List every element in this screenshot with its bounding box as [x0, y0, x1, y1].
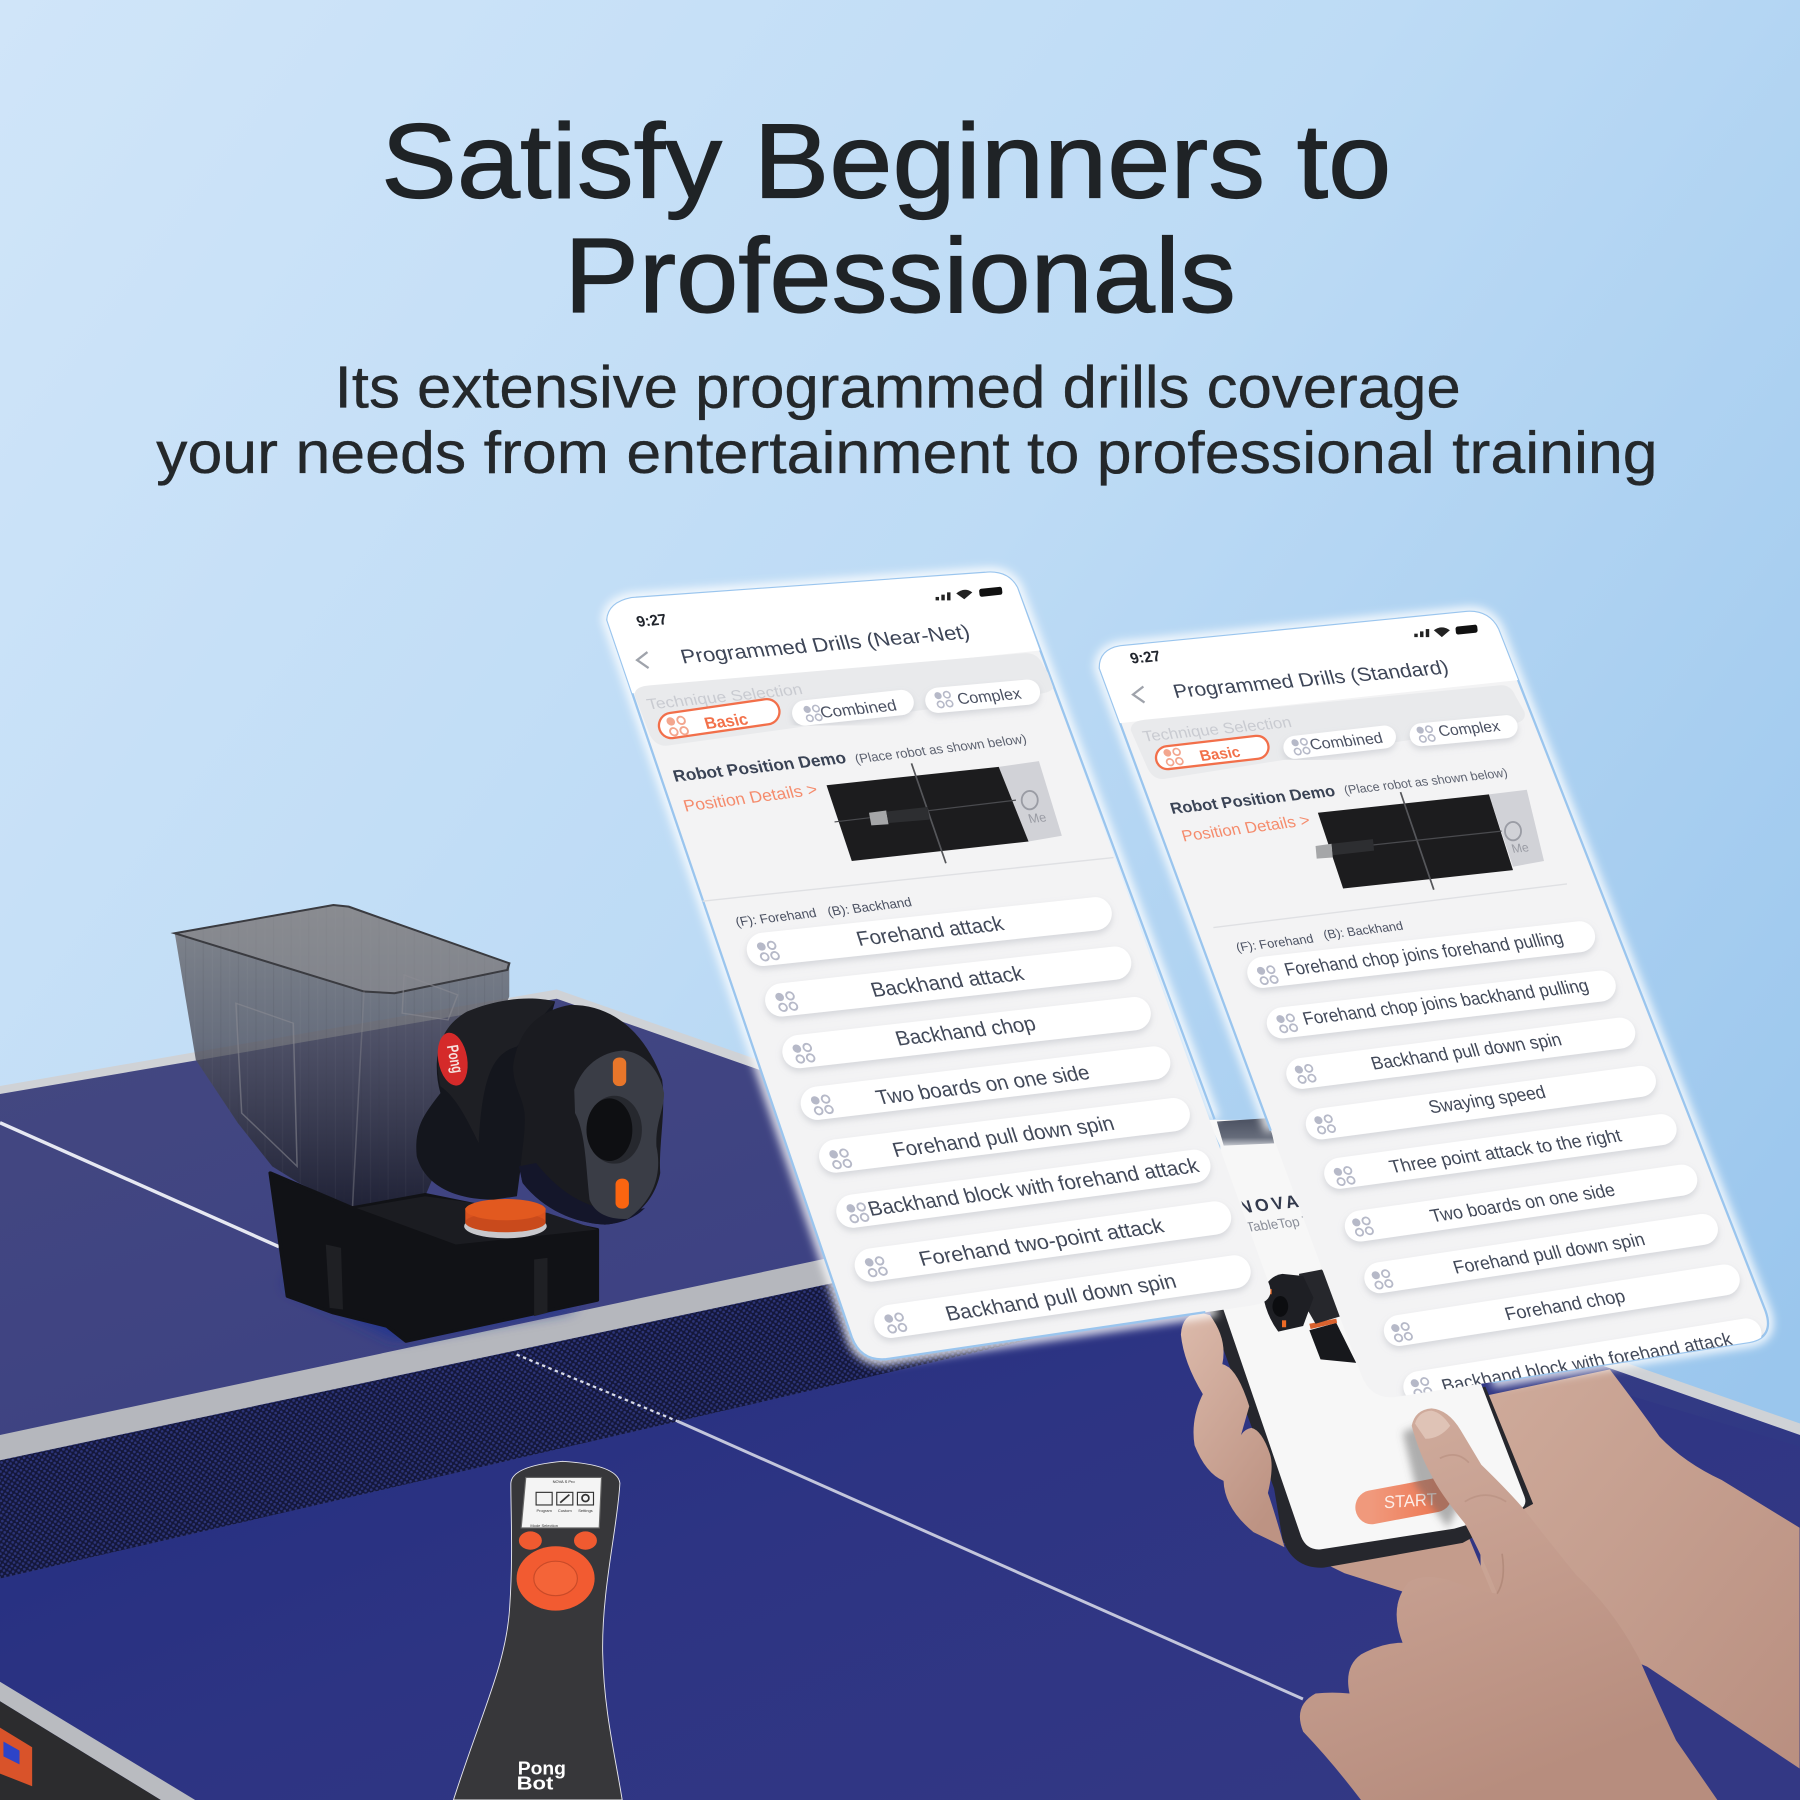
back chevron [637, 652, 649, 668]
drill list: Backhand pull down spin [942, 1270, 1179, 1326]
remote screen: Custom [558, 1508, 572, 1513]
remote screen: NOVA S Pro [553, 1479, 575, 1484]
near half surface [0, 1286, 1800, 1800]
lens [586, 1096, 642, 1164]
legend: (F): Forehand [1234, 932, 1315, 955]
head [513, 1005, 663, 1225]
subtitle: Its extensive programmed drills coverage [335, 354, 1461, 421]
phone top bar between panels [1217, 1118, 1274, 1146]
phone screen [1222, 1306, 1525, 1549]
drill list: Backhand block with forehand attack [865, 1154, 1202, 1221]
orange ring [464, 1199, 547, 1238]
subtitle: your needs from entertainment to professional training [156, 419, 1658, 486]
title: Professionals [564, 217, 1236, 335]
status bar [634, 587, 1003, 631]
phone frame [1208, 1306, 1533, 1568]
remote screen [521, 1477, 602, 1528]
legend [733, 894, 914, 929]
drill list: Forehand pull down spin [1450, 1228, 1647, 1278]
drill list: Backhand pull down spin [1368, 1028, 1564, 1073]
phone panel right: standard drills [1091, 603, 1768, 1397]
start button: START [1384, 1490, 1437, 1512]
drill list: Forehand two-point attack [916, 1214, 1167, 1271]
technique selection: Technique Selection [645, 681, 805, 713]
robot position demo: (Place robot as shown below) [853, 731, 1028, 766]
drill list: Forehand pull down spin [890, 1112, 1117, 1162]
drill list: Backhand chop [893, 1012, 1039, 1050]
back chevron [1133, 686, 1145, 703]
technique selection: Complex [1436, 718, 1502, 740]
legend: (B): Backhand [1322, 919, 1405, 942]
base [270, 1173, 597, 1341]
remote logo: Pong [518, 1758, 566, 1779]
net top band [0, 1165, 1263, 1460]
NOVA app text: NOVA [1236, 1191, 1304, 1217]
remote screen: Settings [578, 1508, 593, 1513]
robot position demo: (Place robot as shown below) [1342, 766, 1509, 797]
technique selection: Basic [1198, 744, 1243, 765]
net mesh [0, 1192, 1263, 1578]
drill list: Two boards on one side [1427, 1179, 1618, 1226]
table tennis table [0, 990, 1800, 1800]
drill list: Two boards on one side [873, 1061, 1093, 1110]
table diagram [827, 761, 1062, 863]
drill list: Forehand attack [853, 912, 1007, 951]
title: Satisfy Beginners to [381, 102, 1391, 220]
red logo badge: Pong [443, 1044, 467, 1074]
remote logo: Bot [517, 1773, 553, 1794]
red logo badge [434, 1031, 471, 1087]
robot position demo [671, 731, 1028, 816]
technique selection: Technique Selection [1141, 714, 1294, 745]
table diagram: Me [1510, 841, 1531, 856]
phone panel left: near-net drills [597, 562, 1270, 1359]
drill list: Forehand chop joins forehand pulling [1281, 927, 1566, 980]
table diagram [1316, 790, 1544, 890]
technique selection: Basic [702, 711, 750, 733]
technique card [1131, 685, 1525, 779]
pointing hand [1300, 1408, 1718, 1800]
center line near half [677, 1421, 1303, 1699]
robot position demo: Robot Position Demo [1168, 783, 1338, 818]
remote buttons [517, 1531, 597, 1611]
drill list: Three point attack to the right [1386, 1125, 1624, 1177]
drill list: Forehand chop joins backhand pulling [1300, 974, 1591, 1029]
table diagram: Me [1026, 810, 1048, 826]
header bar [607, 572, 1040, 694]
legend [1234, 919, 1405, 955]
title [381, 102, 1391, 335]
drill list [756, 912, 1234, 1333]
palm under phone [1282, 1528, 1494, 1597]
remote logo [517, 1758, 566, 1794]
status bar: 9:27 [634, 611, 669, 631]
drill list: Swaying speed [1425, 1081, 1548, 1117]
technique selection: Complex [955, 686, 1024, 708]
hopper [175, 905, 509, 1208]
robot position demo: Position Details > [1180, 812, 1312, 845]
head face plate [574, 1050, 664, 1219]
technique selection: Combined [1308, 730, 1385, 754]
remote control [453, 1461, 622, 1800]
drill list: Forehand chop [1502, 1285, 1628, 1324]
legend: (F): Forehand [733, 905, 818, 929]
status bar [1128, 624, 1478, 667]
NOVA app text: TableTop Trainer [1244, 1209, 1347, 1235]
drill list: Backhand attack [868, 962, 1027, 1002]
remote screen: Program [536, 1508, 552, 1513]
heading: Programmed Drills (Standard) [1171, 657, 1451, 703]
header bar [1091, 603, 1522, 723]
drill list: Backhand block with forehand attack [1439, 1328, 1735, 1396]
small robot in phone screen [1263, 1270, 1356, 1363]
legend: (B): Backhand [825, 894, 914, 919]
technique selection [1141, 714, 1506, 766]
supporting fingers [1181, 1313, 1284, 1547]
technique card [635, 653, 1054, 746]
robot position demo: Robot Position Demo [671, 749, 848, 786]
NOVA app text [1241, 1196, 1303, 1232]
heading: Programmed Drills (Near-Net) [678, 622, 973, 668]
table corner [0, 1682, 195, 1800]
technique selection [645, 681, 1027, 736]
arm [416, 999, 555, 1200]
status bar: 9:27 [1128, 648, 1163, 667]
drill list [1256, 927, 1746, 1397]
center line far half [0, 1123, 279, 1247]
hand holding phone [1181, 1120, 1800, 1769]
rear hand and wrist [1477, 1369, 1800, 1769]
orange LEDs [613, 1057, 626, 1086]
finger shadow [1403, 1424, 1465, 1528]
subtitle [156, 354, 1658, 486]
robot position demo [1168, 766, 1509, 845]
robot position demo: Position Details > [681, 781, 820, 816]
robot [175, 905, 664, 1341]
technique selection: Combined [818, 698, 899, 722]
remote screen: Mode Selection [530, 1523, 558, 1528]
